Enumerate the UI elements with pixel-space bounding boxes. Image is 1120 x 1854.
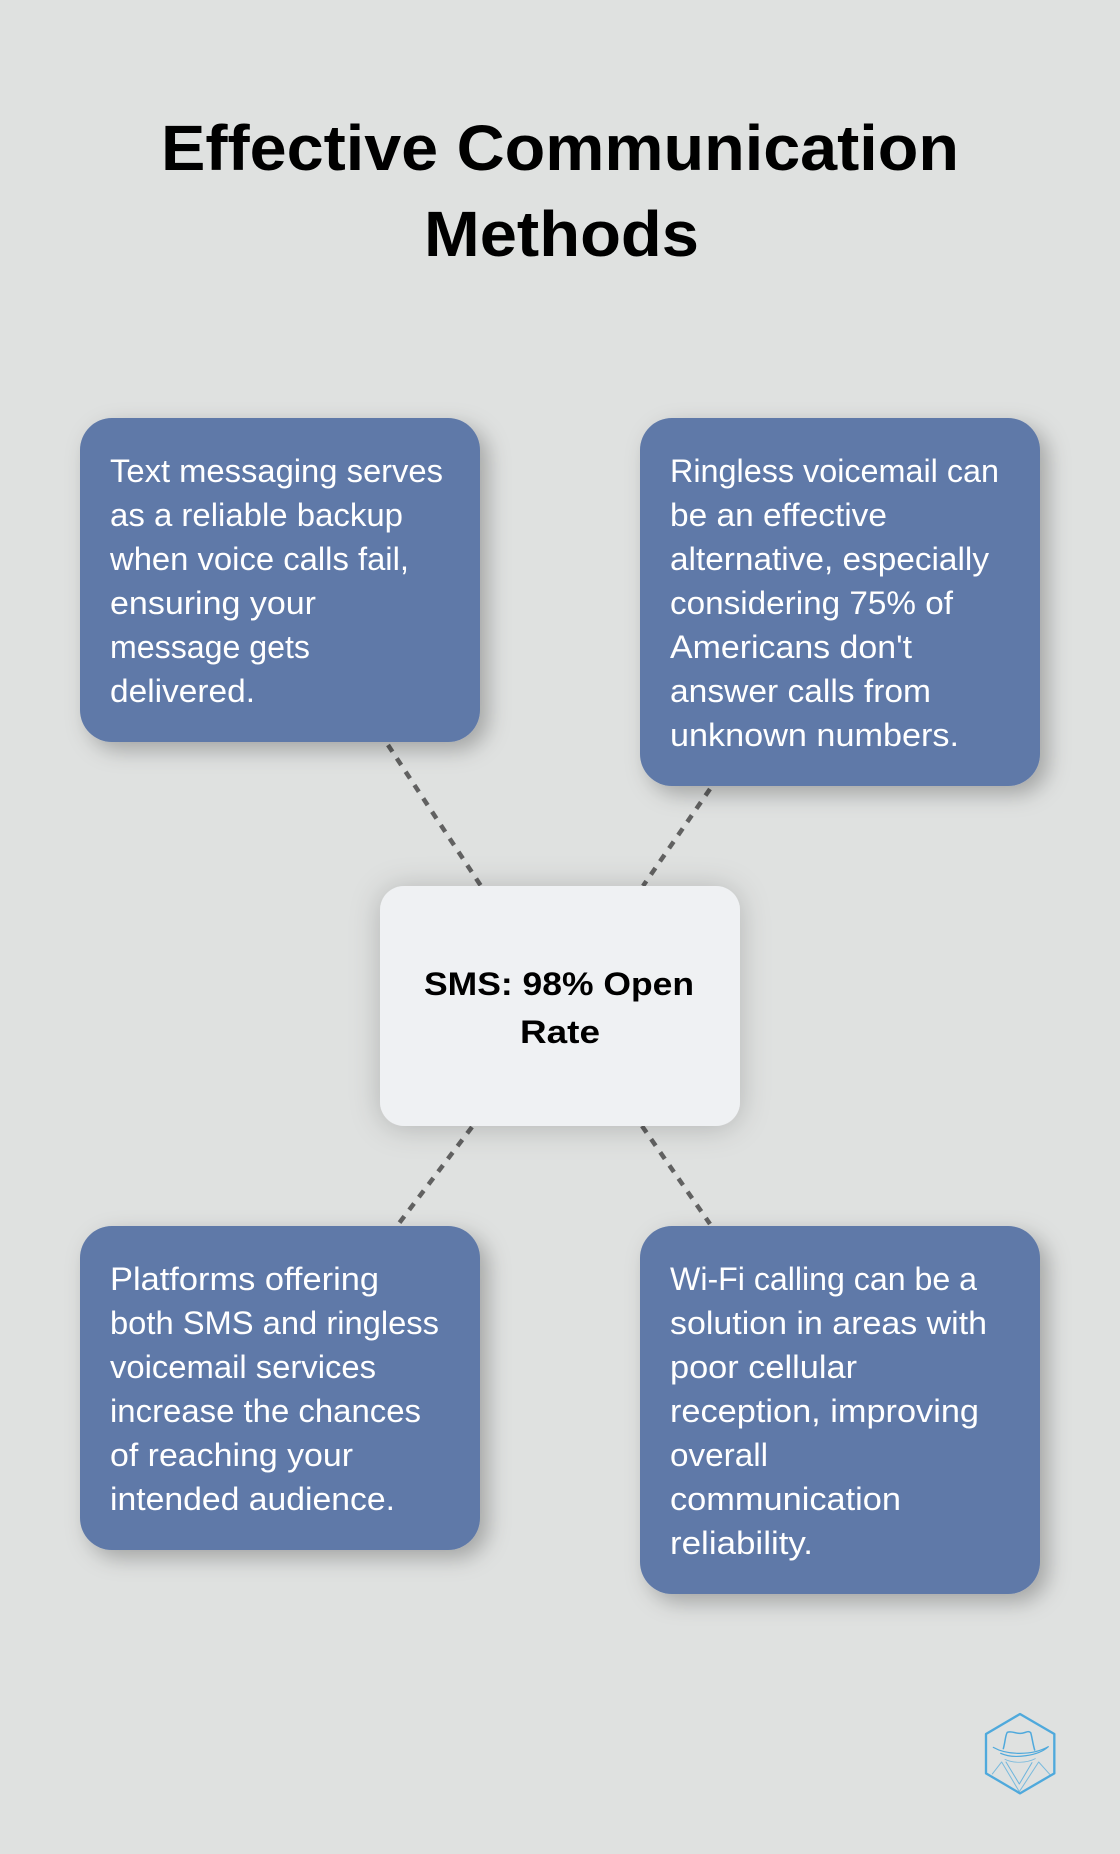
- title: [161, 112, 959, 270]
- card text: text messaging: ensuring your: [110, 585, 316, 621]
- title: Effective Communication: [161, 112, 959, 184]
- card text: ringless voicemail: answer calls from: [670, 673, 931, 709]
- card text: ringless voicemail: considering 75% of: [670, 585, 953, 621]
- panel: ringless voicemail card: [640, 418, 1040, 786]
- card text: wi-fi calling: Wi-Fi calling can be a: [670, 1261, 977, 1297]
- card text: wi-fi calling: overall: [670, 1437, 768, 1473]
- card text: wi-fi calling: reception, improving: [670, 1393, 979, 1429]
- connector: center to bottom-right card: [642, 1126, 710, 1224]
- card text: platforms: voicemail services: [110, 1349, 376, 1385]
- card text: wi-fi calling: [670, 1261, 987, 1561]
- connector: top-right card to center: [643, 789, 710, 886]
- card text: wi-fi calling: reliability.: [670, 1525, 813, 1561]
- card text: ringless voicemail: unknown numbers.: [670, 717, 959, 753]
- panel: platforms card: [80, 1226, 480, 1550]
- central statistic text: [424, 966, 694, 1050]
- central statistic text: SMS: 98% Open: [424, 966, 694, 1002]
- icon: hexagon spy logo: [986, 1714, 1054, 1793]
- panel: central statistic: [380, 886, 740, 1126]
- card text: platforms: intended audience.: [110, 1481, 395, 1517]
- card text: platforms: Platforms offering: [110, 1261, 379, 1297]
- connector: center to bottom-left card: [397, 1127, 472, 1226]
- card text: ringless voicemail: alternative, especially: [670, 541, 989, 577]
- panel: text messaging card: [80, 418, 480, 742]
- title: Methods: [424, 198, 699, 270]
- card text: text messaging: delivered.: [110, 673, 255, 709]
- panel: wi-fi calling card: [640, 1226, 1040, 1594]
- card text: text messaging: when voice calls fail,: [109, 541, 409, 577]
- card text: platforms: increase the chances: [110, 1393, 421, 1429]
- card text: text messaging: message gets: [110, 629, 310, 665]
- card text: text messaging: as a reliable backup: [110, 497, 403, 533]
- card text: wi-fi calling: poor cellular: [670, 1349, 857, 1385]
- card text: wi-fi calling: solution in areas with: [670, 1305, 987, 1341]
- connector: top-left card to center: [388, 745, 481, 886]
- card text: platforms: of reaching your: [110, 1437, 353, 1473]
- card text: ringless voicemail: be an effective: [670, 497, 887, 533]
- card text: ringless voicemail: [670, 453, 999, 753]
- central statistic text: Rate: [520, 1014, 600, 1050]
- card text: text messaging: [109, 453, 443, 709]
- card text: platforms: both SMS and ringless: [110, 1305, 439, 1341]
- card text: platforms: [110, 1261, 439, 1517]
- card text: ringless voicemail: Ringless voicemail can: [670, 453, 999, 489]
- card text: text messaging: Text messaging serves: [110, 453, 443, 489]
- card text: wi-fi calling: communication: [670, 1481, 901, 1517]
- card text: ringless voicemail: Americans don't: [670, 629, 912, 665]
